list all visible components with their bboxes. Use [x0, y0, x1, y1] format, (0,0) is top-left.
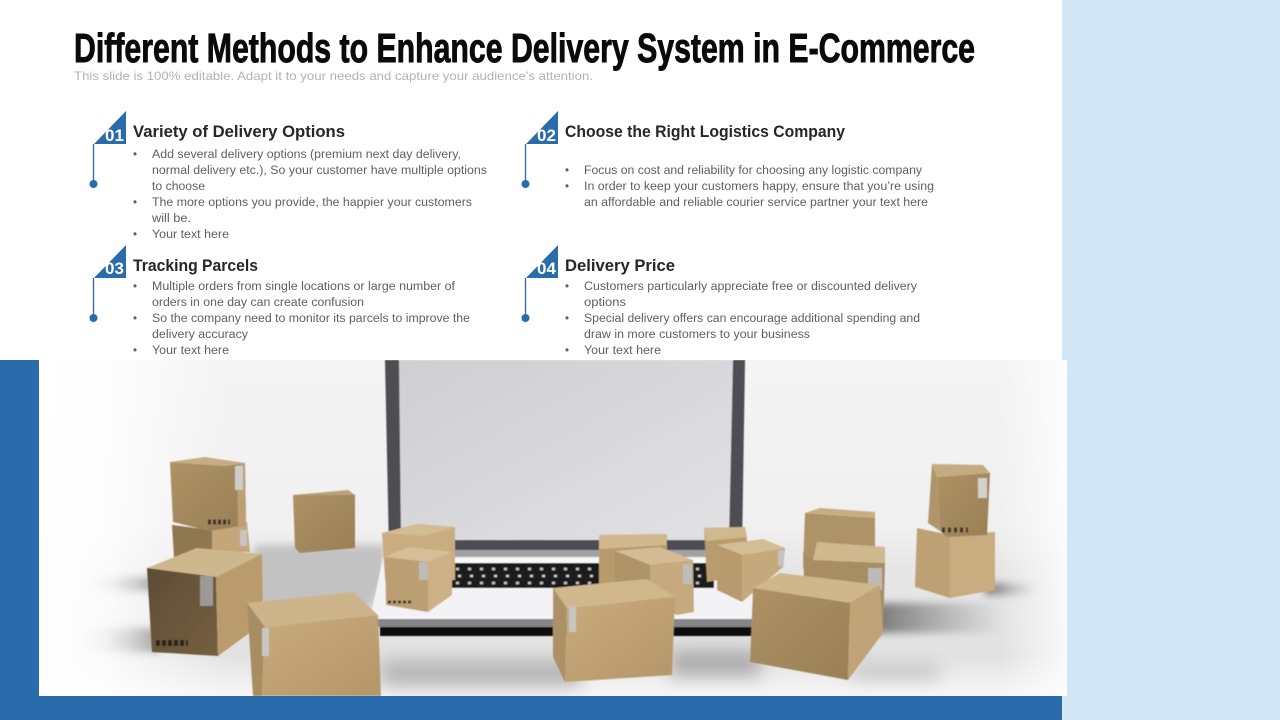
box: large right front: [750, 573, 883, 680]
icon: flag 03: 03: [105, 259, 124, 278]
icon: flag 03: [90, 245, 126, 322]
text block 01: The more options you provide, the happier your customers: [152, 197, 472, 209]
icon: flag 04: [522, 245, 558, 322]
box: on keyboard rear: [382, 524, 455, 580]
text block 02: •: [565, 181, 569, 193]
text block 04: •: [565, 313, 569, 325]
text block 02: Focus on cost and reliability for choosing any logistic company: [584, 165, 922, 177]
text block 03: [133, 281, 470, 357]
icon: flag 01: 01: [105, 126, 124, 145]
subtitle: This slide is 100% editable. Adapt it to your needs and capture your audience's attention.: [74, 69, 593, 83]
box: right middle: [803, 542, 885, 633]
laptop: [370, 360, 770, 636]
text block 03: delivery accuracy: [152, 329, 248, 341]
box: right stack upper: [928, 464, 990, 537]
text block 01: to choose: [152, 181, 205, 193]
text block 04: [565, 281, 920, 357]
text block 03: •: [133, 281, 137, 293]
text block 01: Add several delivery options (premium next day delivery,: [152, 149, 461, 161]
text block 02: [565, 165, 934, 209]
text block 02: In order to keep your customers happy, ensure that you’re using: [584, 181, 934, 193]
title: Different Methods to Enhance Delivery System in E-Commerce: [74, 25, 975, 71]
text block 03: Multiple orders from single locations or large number of: [152, 281, 456, 293]
box: front left: [247, 592, 381, 696]
box: laptop right rear: [704, 527, 747, 582]
panel: blue base band: [0, 360, 1062, 720]
box: stacked upper left: [170, 457, 246, 531]
box: laptop right front: [717, 539, 785, 602]
text block 03: So the company need to monitor its parcels to improve the: [152, 313, 470, 325]
text block 02: •: [565, 165, 569, 177]
panel: item 04 delivery price: [522, 245, 920, 357]
panel: item 02 choose the right logistics company: [522, 111, 934, 209]
box: centre rear: [599, 534, 667, 590]
box: right stack lower: [915, 528, 995, 598]
icon: flag 04: 04: [537, 259, 556, 278]
text block 04: draw in more customers to your business: [584, 329, 810, 341]
heading 04: Delivery Price: [565, 256, 675, 275]
panel: item 01 variety of delivery options: [90, 111, 487, 241]
text block 01: [133, 149, 487, 241]
box: small cube middle: [293, 490, 355, 553]
text block 04: Customers particularly appreciate free or discounted delivery: [584, 281, 917, 293]
icon: flag 02: 02: [537, 126, 556, 145]
icon: flag 01: [90, 111, 126, 188]
text block 01: •: [133, 149, 137, 161]
box: centre middle: [615, 547, 694, 615]
text block 01: normal delivery etc.), So your customer have multiple options: [152, 165, 487, 177]
text block 01: •: [133, 197, 137, 209]
panel: light blue right band: [1062, 0, 1280, 720]
text block 04: Special delivery offers can encourage additional spending and: [584, 313, 920, 325]
text block 04: •: [565, 281, 569, 293]
box: on keyboard front: [385, 547, 452, 612]
text block 03: •: [133, 345, 137, 357]
text block 04: •: [565, 345, 569, 357]
panel: item 03 tracking parcels: [90, 245, 470, 357]
box: large dark left: [147, 548, 263, 656]
text block 01: Your text here: [152, 229, 229, 241]
box: front centre: [553, 579, 675, 682]
text block 02: an affordable and reliable courier service partner your text here: [584, 197, 928, 209]
icon: flag 02: [522, 111, 558, 188]
text block 01: will be.: [151, 213, 191, 225]
text block 04: Your text here: [584, 345, 661, 357]
heading 02: Choose the Right Logistics Company: [565, 122, 845, 141]
illustration: laptop surrounded by cardboard parcels: [39, 360, 1067, 696]
heading 03: Tracking Parcels: [133, 256, 258, 275]
box: stacked lower left: [172, 522, 250, 557]
box: right rear: [803, 508, 875, 568]
text block 01: •: [133, 229, 137, 241]
text block 03: •: [133, 313, 137, 325]
text block 03: Your text here: [152, 345, 229, 357]
text block 04: options: [584, 297, 626, 309]
heading 01: Variety of Delivery Options: [133, 122, 345, 141]
text block 03: orders in one day can create confusion: [152, 297, 364, 309]
